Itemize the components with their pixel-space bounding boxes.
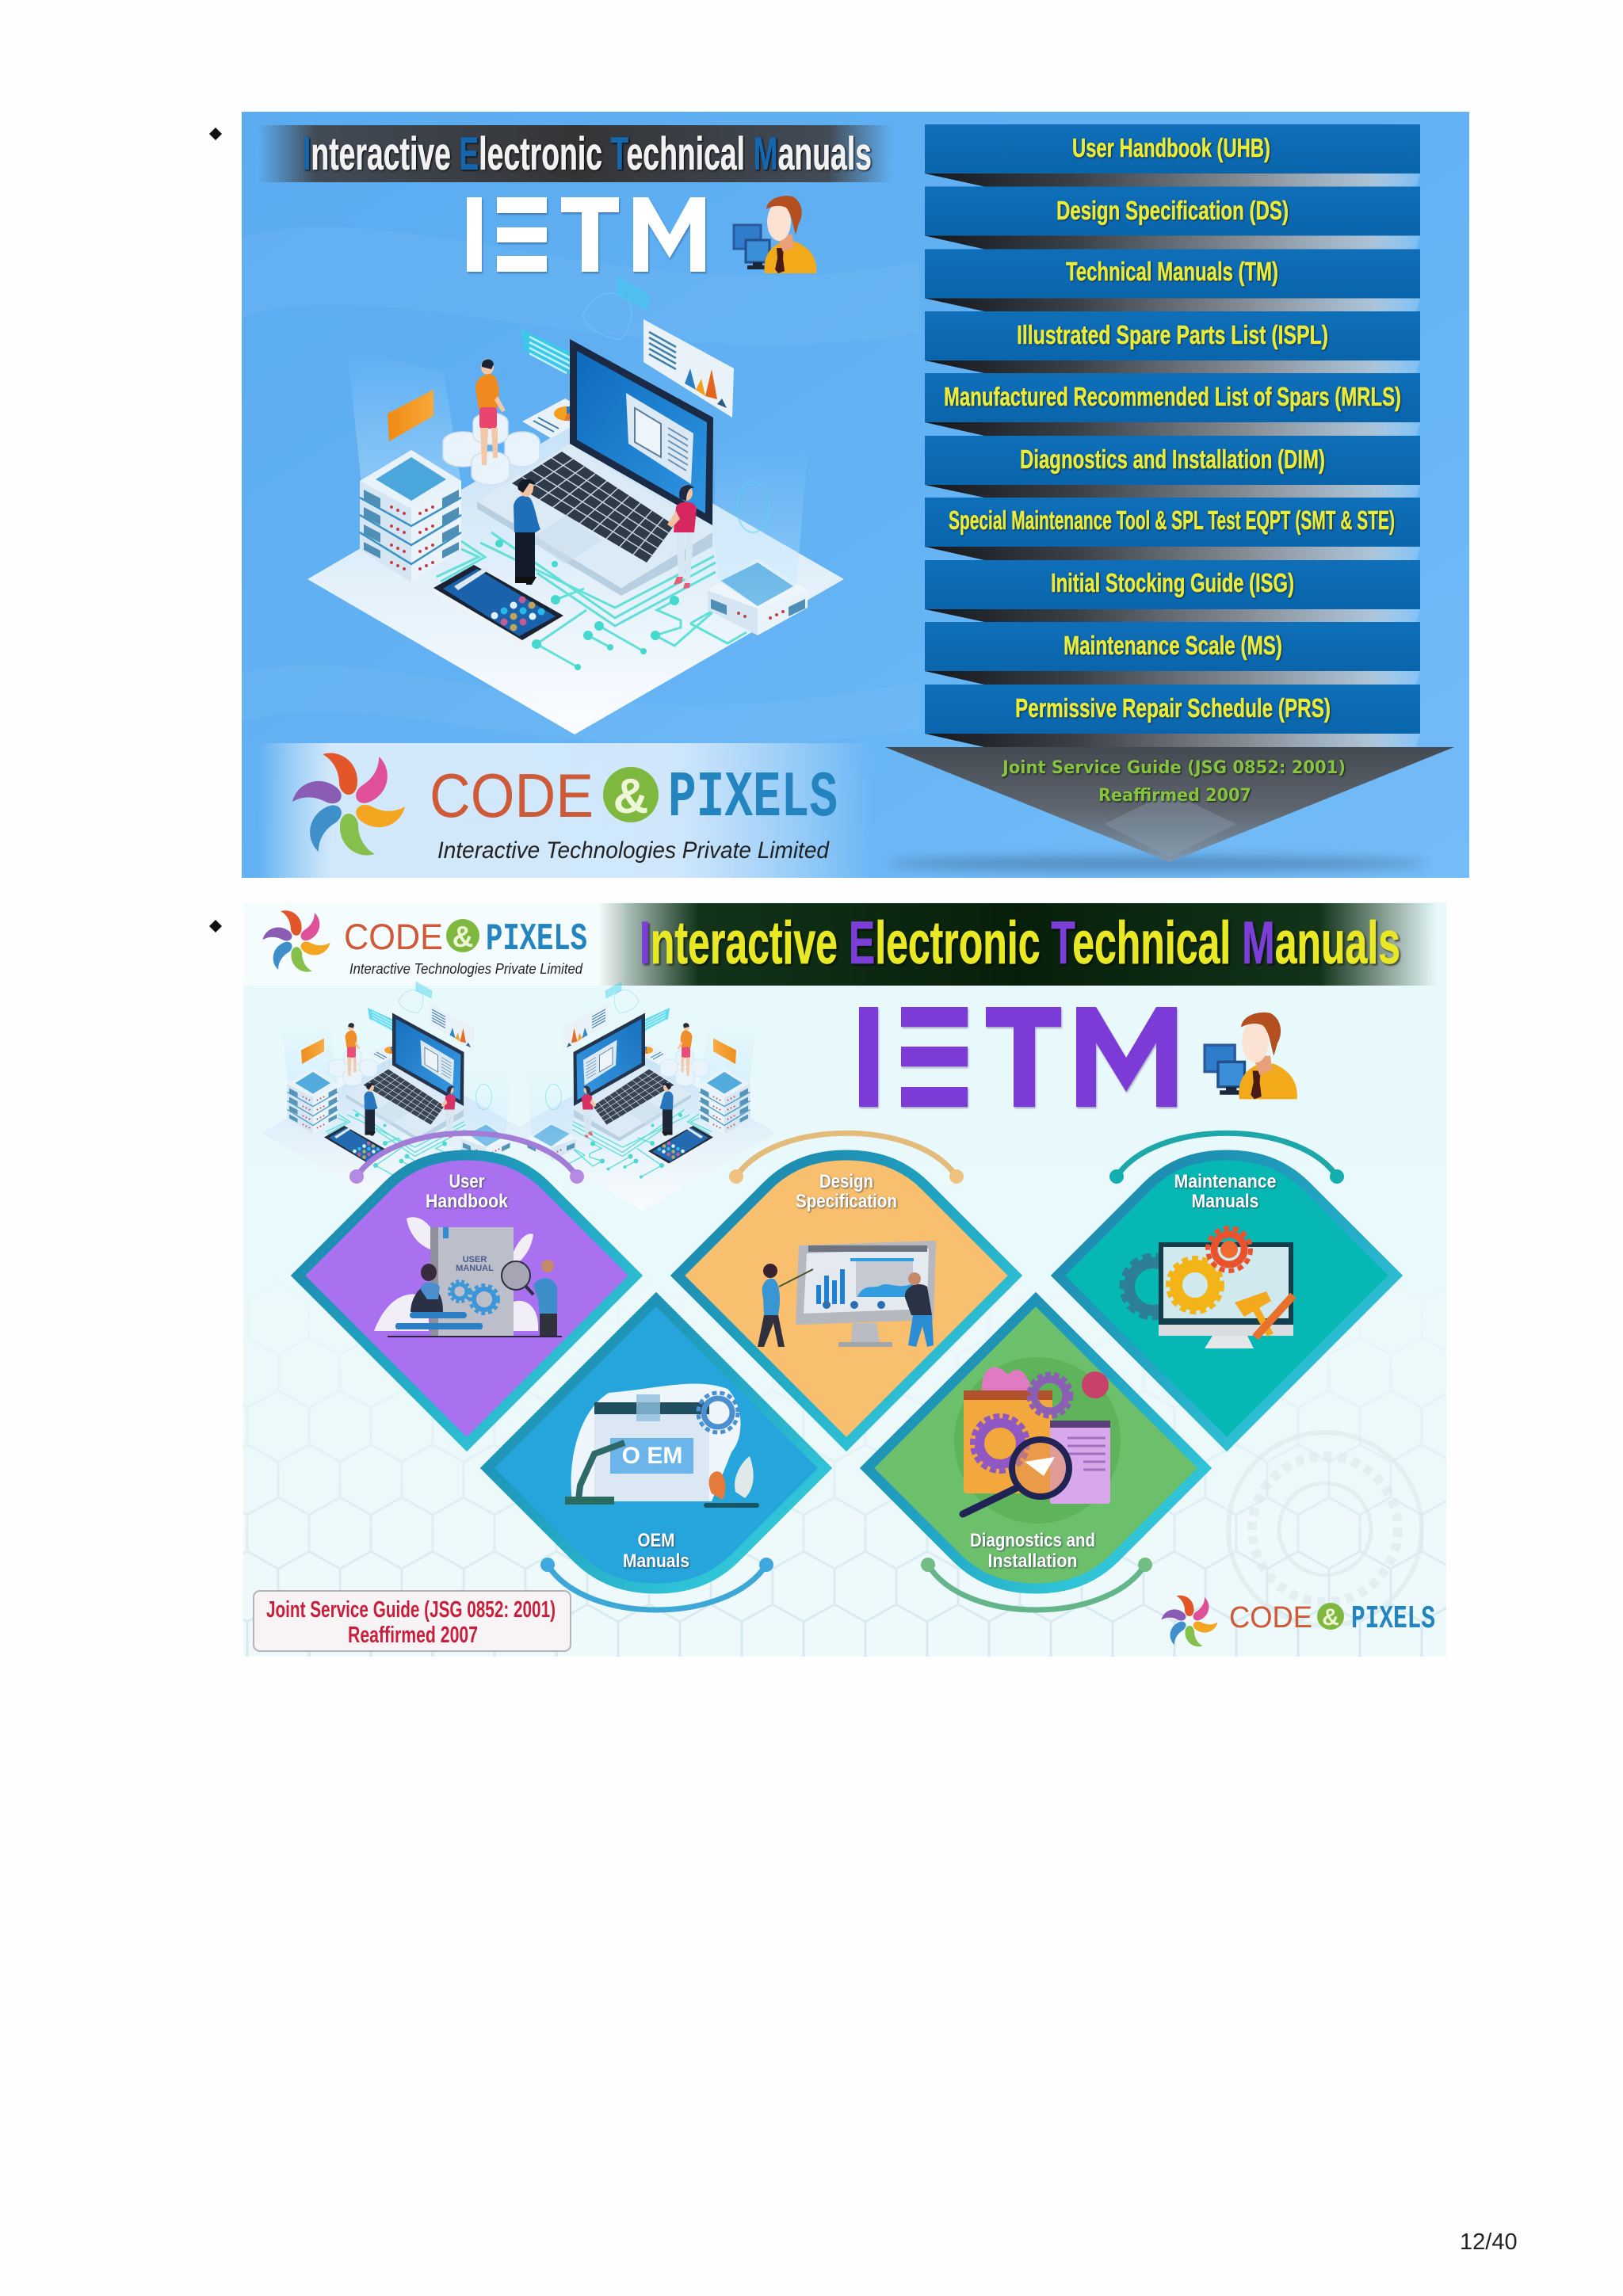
monitor with presenters [758, 1241, 936, 1347]
handbook illustration: MANUAL [456, 1264, 494, 1273]
logo: header Code & Pixels [262, 910, 587, 977]
bar: TM: Technical Manuals (TM) [1066, 257, 1278, 286]
label [426, 1171, 509, 1212]
label: Specification [796, 1191, 897, 1212]
bar: MS [925, 622, 1420, 685]
CODE: CODE [344, 917, 443, 957]
ampersand badge [446, 919, 479, 953]
bar: MRLS [925, 373, 1420, 436]
label: User [449, 1171, 485, 1192]
watermark emblem [1228, 1432, 1422, 1626]
chart card [643, 319, 734, 418]
CODE: CODE [1229, 1601, 1312, 1634]
diamond: Design Specification [678, 1133, 1015, 1444]
bar: DS [925, 187, 1420, 249]
bar: UHB [925, 124, 1420, 187]
JSG line 2: Reaffirmed 2007 [1098, 786, 1251, 806]
bar: PRS [925, 685, 1420, 747]
man in blue [514, 479, 540, 585]
logo band [258, 743, 872, 878]
panel background [242, 112, 1469, 878]
ampersand badge: & [453, 921, 473, 953]
wordmark CODE: CODE [430, 761, 594, 830]
label [1174, 1171, 1276, 1212]
diamond: User Handbook [298, 1133, 636, 1444]
ampersand badge: & [1322, 1604, 1339, 1630]
tagline: Interactive Technologies Private Limited [437, 837, 830, 864]
icon: pinwheel [292, 753, 406, 856]
woman presenter [758, 1264, 813, 1347]
circuit traces [437, 532, 747, 667]
diamond: Maintenance Manuals [1058, 1133, 1396, 1444]
line 1: Joint Service Guide (JSG 0852: 2001) [266, 1597, 556, 1623]
title text: Interactive Electronic Technical Manuals [303, 128, 872, 180]
logo: Code & Pixels [258, 743, 872, 878]
icon: operator at computers [1205, 1013, 1297, 1099]
man presenter [905, 1272, 934, 1347]
OEM window with robot arm: O EM [622, 1443, 682, 1469]
label: Manuals [623, 1550, 689, 1572]
bar: DIM: Diagnostics and Installation (DIM) [1020, 444, 1325, 474]
title text: Interactive Electronic Technical Manuals [640, 910, 1400, 977]
bar: ISPL: Illustrated Spare Parts List (ISPL) [1017, 320, 1328, 349]
arc [921, 1558, 1152, 1610]
bullet 1 [209, 128, 222, 140]
label [623, 1530, 689, 1572]
wordmark PIXELS: PIXELS [668, 761, 838, 835]
windows, gears and magnifier [954, 1357, 1121, 1524]
label: OEM [637, 1530, 675, 1551]
panel background [243, 902, 1446, 1657]
bar: SMT and STE [925, 498, 1420, 560]
monitor with gears and tools [1122, 1228, 1293, 1348]
label: Handbook [426, 1191, 509, 1212]
PIXELS: PIXELS [1351, 1601, 1435, 1638]
bar: DS: Design Specification (DS) [1056, 196, 1289, 225]
pinwheel [1161, 1596, 1218, 1646]
handbook illustration [374, 1217, 562, 1337]
OEM window with robot arm [565, 1384, 759, 1508]
bar: MS: Maintenance Scale (MS) [1064, 631, 1282, 660]
JSG line 1: Joint Service Guide (JSG 0852: 2001) [1001, 758, 1346, 778]
bar: ISG: Initial Stocking Guide (ISG) [1051, 568, 1294, 597]
bar: TM [925, 249, 1420, 311]
arc [349, 1133, 584, 1184]
arc [1109, 1133, 1344, 1184]
cyan note card [521, 329, 581, 380]
illustration: laptop scene left [262, 981, 529, 1211]
arc [729, 1133, 964, 1184]
hexagon background pattern [243, 1404, 1446, 1657]
panel: IETM document types on blue [242, 112, 1469, 878]
PIXELS: PIXELS [486, 918, 587, 961]
bar: UHB: User Handbook (UHB) [1072, 133, 1270, 162]
icon: operator at computers [734, 196, 816, 273]
server stack [360, 450, 461, 582]
handbook illustration: USER [463, 1255, 487, 1264]
arc [540, 1558, 773, 1610]
bar: ISPL [925, 311, 1420, 373]
label: Maintenance [1174, 1171, 1276, 1192]
small cyan card [617, 276, 650, 311]
email envelope [388, 390, 433, 441]
funnel triangle: JSG [885, 747, 1454, 871]
logo: footer Code & Pixels [1161, 1596, 1435, 1646]
ampersand badge [603, 767, 659, 824]
label: Design [819, 1171, 873, 1192]
bullet 2 [209, 920, 222, 933]
bar: PRS: Permissive Repair Schedule (PRS) [1015, 693, 1331, 723]
label: Diagnostics and [970, 1530, 1095, 1551]
IETM logotype purple [859, 1007, 1177, 1107]
diamond: Diagnostics and Installation [867, 1299, 1205, 1610]
header logo band [243, 902, 624, 986]
laptop [477, 339, 713, 596]
title band [258, 125, 892, 182]
bar: DIM [925, 436, 1420, 498]
JSG callout box [254, 1591, 571, 1651]
panel: IETM categories on pale [243, 902, 1446, 1657]
IETM logotype white [467, 197, 705, 272]
background swooshes [242, 227, 919, 746]
label: Installation [987, 1550, 1078, 1572]
document list bars [925, 124, 1420, 747]
illustration: laptop scene right [508, 981, 777, 1211]
title band [598, 903, 1437, 986]
bar: MRLS: Manufactured Recommended List of Spars (MRLS) [944, 382, 1401, 411]
bar: ISG [925, 560, 1420, 622]
pie chart card [522, 399, 594, 438]
tagline: Interactive Technologies Private Limited [349, 961, 583, 977]
cloud outline [582, 293, 632, 339]
pinwheel [262, 910, 330, 972]
phone [433, 565, 563, 646]
right hologram server [708, 444, 808, 635]
label: Manuals [1192, 1191, 1258, 1212]
label [970, 1530, 1095, 1572]
database discs [443, 413, 540, 485]
woman in pink [667, 485, 697, 589]
ampersand badge: & [613, 769, 648, 824]
label [796, 1171, 897, 1212]
ampersand badge [1317, 1603, 1344, 1630]
left hologram cone [347, 348, 461, 483]
diamond: OEM Manuals [487, 1299, 825, 1610]
illustration: isometric laptop scene [307, 276, 844, 734]
page number: 12/40 [1460, 2229, 1518, 2255]
floor [307, 424, 844, 734]
line 2: Reaffirmed 2007 [348, 1623, 478, 1648]
woman in orange [475, 359, 506, 465]
